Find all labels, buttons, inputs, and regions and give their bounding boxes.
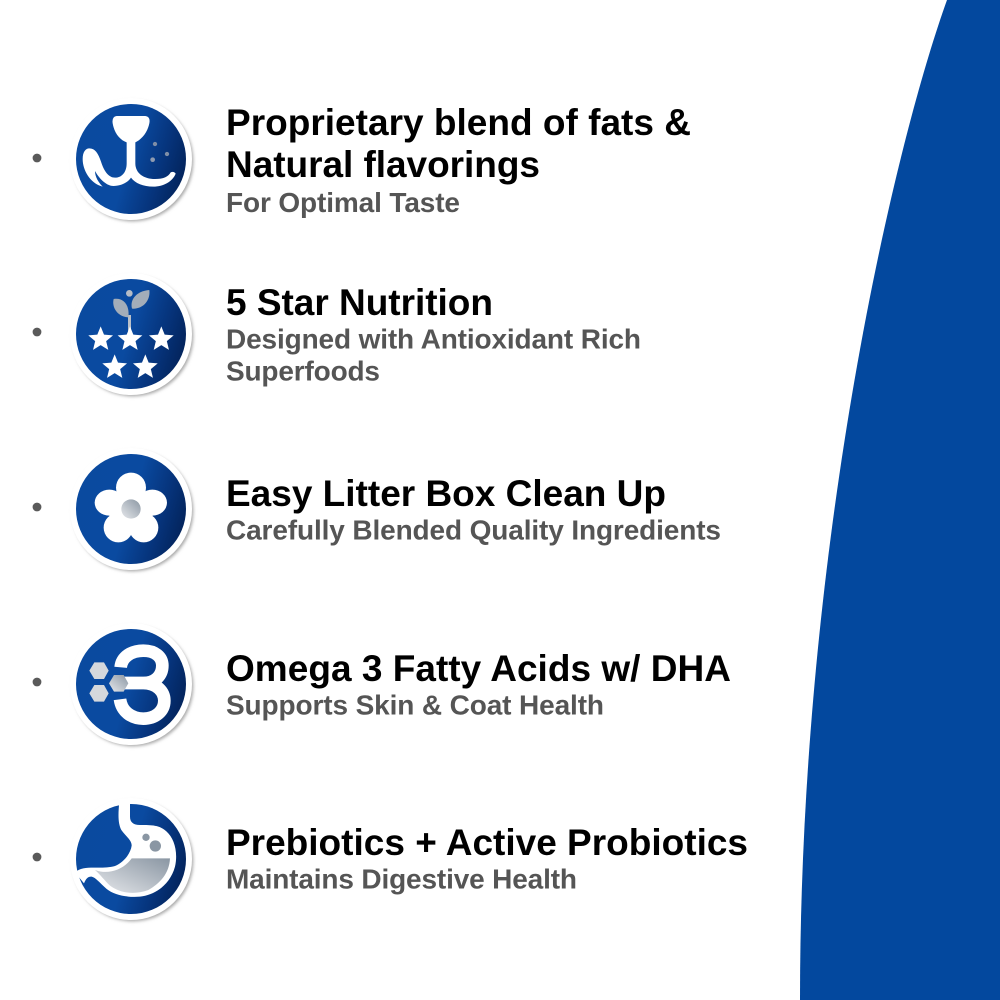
icon: omega 3 <box>70 623 193 746</box>
heading 4: Omega 3 Fatty Acids w/ DHA <box>226 648 731 689</box>
bullet 1 <box>33 154 41 162</box>
bullet 3 <box>33 503 41 511</box>
subtext 2: Superfoods <box>226 356 380 386</box>
icon: sprout and stars <box>70 273 193 396</box>
subtext 1: For Optimal Taste <box>226 187 460 218</box>
row 2: 5 star nutrition <box>33 273 641 396</box>
subtext 2: Designed with Antioxidant Rich <box>226 324 641 354</box>
row 4: omega 3 <box>33 623 731 746</box>
subtext 5: Maintains Digestive Health <box>226 864 577 894</box>
heading 1 <box>226 102 691 185</box>
heading 5: Prebiotics + Active Probiotics <box>226 822 748 863</box>
heading 1: Proprietary blend of fats & <box>226 102 691 143</box>
subtext 2 <box>226 324 641 386</box>
icon: stomach <box>70 798 193 921</box>
heading 2: 5 Star Nutrition <box>226 282 493 323</box>
icon: flower <box>70 448 193 571</box>
row 3: litter box <box>33 448 721 571</box>
row 5: probiotics <box>33 798 748 921</box>
heading 1: Natural flavorings <box>226 144 540 185</box>
subtext 4: Supports Skin & Coat Health <box>226 690 604 720</box>
bullet 2 <box>33 328 41 336</box>
bullet 5 <box>33 853 41 861</box>
bullet 4 <box>33 678 41 686</box>
subtext 3: Carefully Blended Quality Ingredients <box>226 514 721 546</box>
blue curved panel <box>800 0 1000 1000</box>
row 1: fats and flavorings <box>33 98 691 221</box>
heading 3: Easy Litter Box Clean Up <box>226 473 666 514</box>
icon: glass and leaf <box>70 98 193 221</box>
